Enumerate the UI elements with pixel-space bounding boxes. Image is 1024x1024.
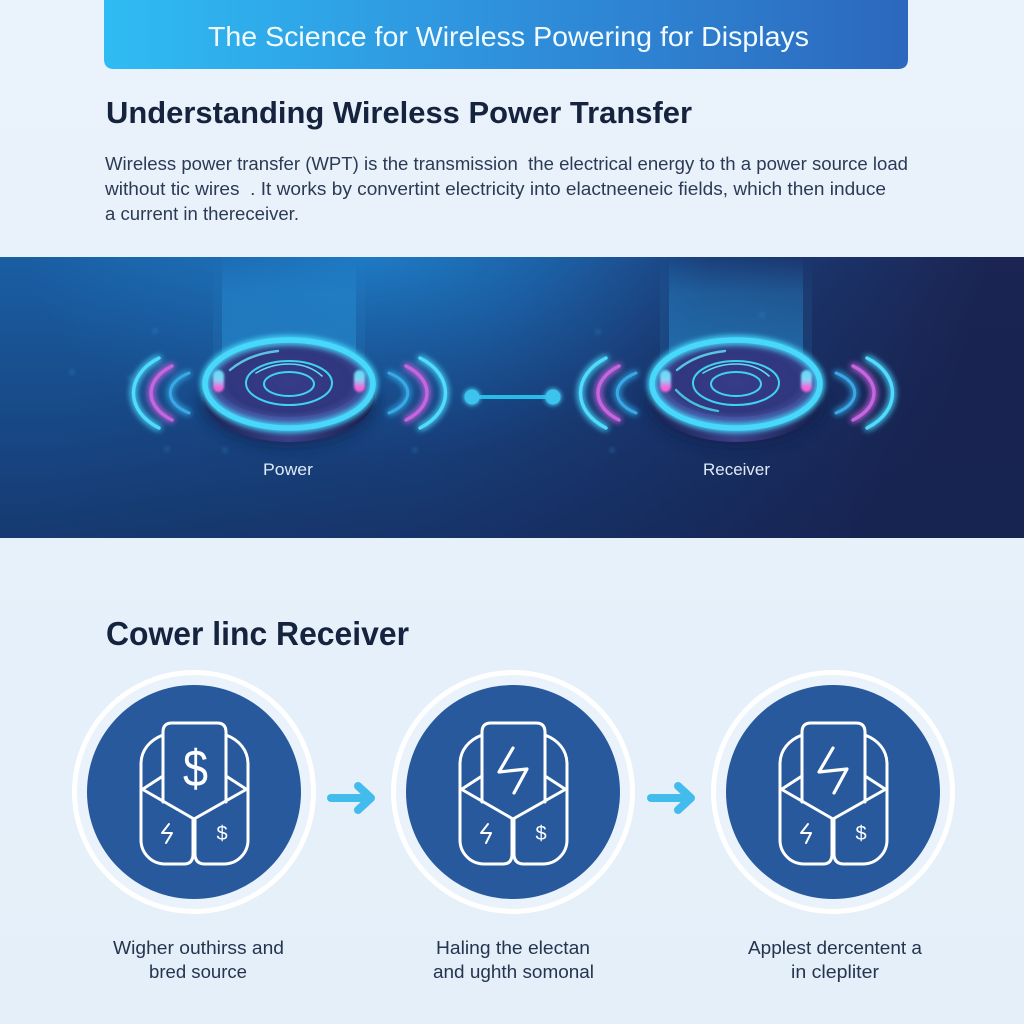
heading: cower linc receiver: Cower linc Receiver [106,615,409,652]
link between transmitter and receiver [464,388,562,406]
label: receiver: Receiver [703,461,771,479]
caption step 3: in clepliter [791,962,879,982]
receiver waves left [580,358,636,428]
caption step 3: Applest dercentent a [748,938,923,958]
intro paragraph: a current in thereceiver. [105,204,299,224]
power transmitter disk [199,257,379,448]
step 1 icon: $ [216,823,228,845]
panel: wireless transfer diagram [0,257,1024,538]
caption step 2 [433,938,594,982]
intro paragraph: without tic wires . It works by convertint electricity into elactneeneic fields, which then induce [104,179,886,199]
title bar [104,0,908,69]
heading: understanding wireless power transfer: Understanding Wireless Power Transfer [106,95,692,130]
step 3 icon: $ [855,823,867,845]
arrow 1 [331,786,371,810]
receiver waves right [836,358,892,428]
arrow 2 [651,786,691,810]
receiver disk [646,257,826,448]
intro paragraph: Wireless power transfer (WPT) is the transmission the electrical energy to th a power source load [105,154,908,174]
caption step 3 [748,938,923,982]
caption step 2: and ughth somonal [433,962,594,982]
label: power: Power [263,461,314,479]
title bar: The Science for Wireless Powering for Displays [208,21,809,52]
step 1 icon [74,672,314,912]
step 2 icon: $ [535,823,547,845]
step 3 icon [714,672,952,912]
intro paragraph [104,154,908,224]
banner background [0,257,1024,538]
caption step 1 [113,938,284,982]
step 2 icon [394,672,632,912]
step 1 icon: $ [183,740,208,798]
caption step 1: bred source [149,962,247,982]
transmitter waves right [389,358,446,428]
caption step 1: Wigher outhirss and [113,938,284,958]
transmitter waves left [134,358,189,428]
caption step 2: Haling the electan [436,938,590,958]
